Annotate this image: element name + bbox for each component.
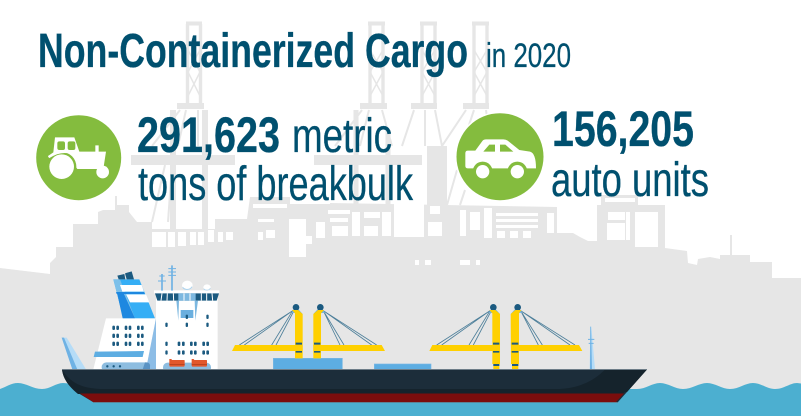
aft crane arm [62, 338, 86, 369]
stat: breakbulk: tons of breakbulk [138, 158, 414, 211]
funnel [113, 271, 155, 318]
cargo containers [273, 358, 431, 370]
ship superstructure [62, 265, 219, 373]
stat: auto units [551, 101, 709, 207]
stat: breakbulk: 291,623 [137, 107, 280, 163]
forward mast [588, 327, 595, 369]
crane 4 [442, 24, 490, 205]
icon: tractor [36, 115, 121, 200]
crane pair forward [429, 304, 582, 369]
stat: auto units: 156,205 [552, 101, 694, 157]
lifeboats [163, 359, 211, 373]
masts and radar domes [158, 265, 211, 291]
stat: breakbulk: metric [292, 110, 392, 163]
title: in 2020 [486, 37, 571, 75]
crane 1 [131, 24, 235, 232]
crane 3 [402, 24, 442, 206]
stat: breakbulk [137, 107, 414, 211]
stat: auto units: auto units [551, 154, 709, 207]
ship deck cranes and cargo [232, 304, 595, 370]
bridge tower [154, 290, 219, 369]
water [0, 383, 801, 416]
ship [62, 265, 647, 402]
icon: car [455, 112, 545, 202]
port skyline silhouette [0, 195, 801, 416]
crane pair aft [232, 304, 385, 358]
title: Non-Containerized Cargo [38, 25, 468, 78]
passenger deck [93, 318, 157, 372]
crane 2 [314, 24, 422, 205]
hull [62, 370, 647, 402]
dock cranes silhouette [131, 24, 490, 232]
